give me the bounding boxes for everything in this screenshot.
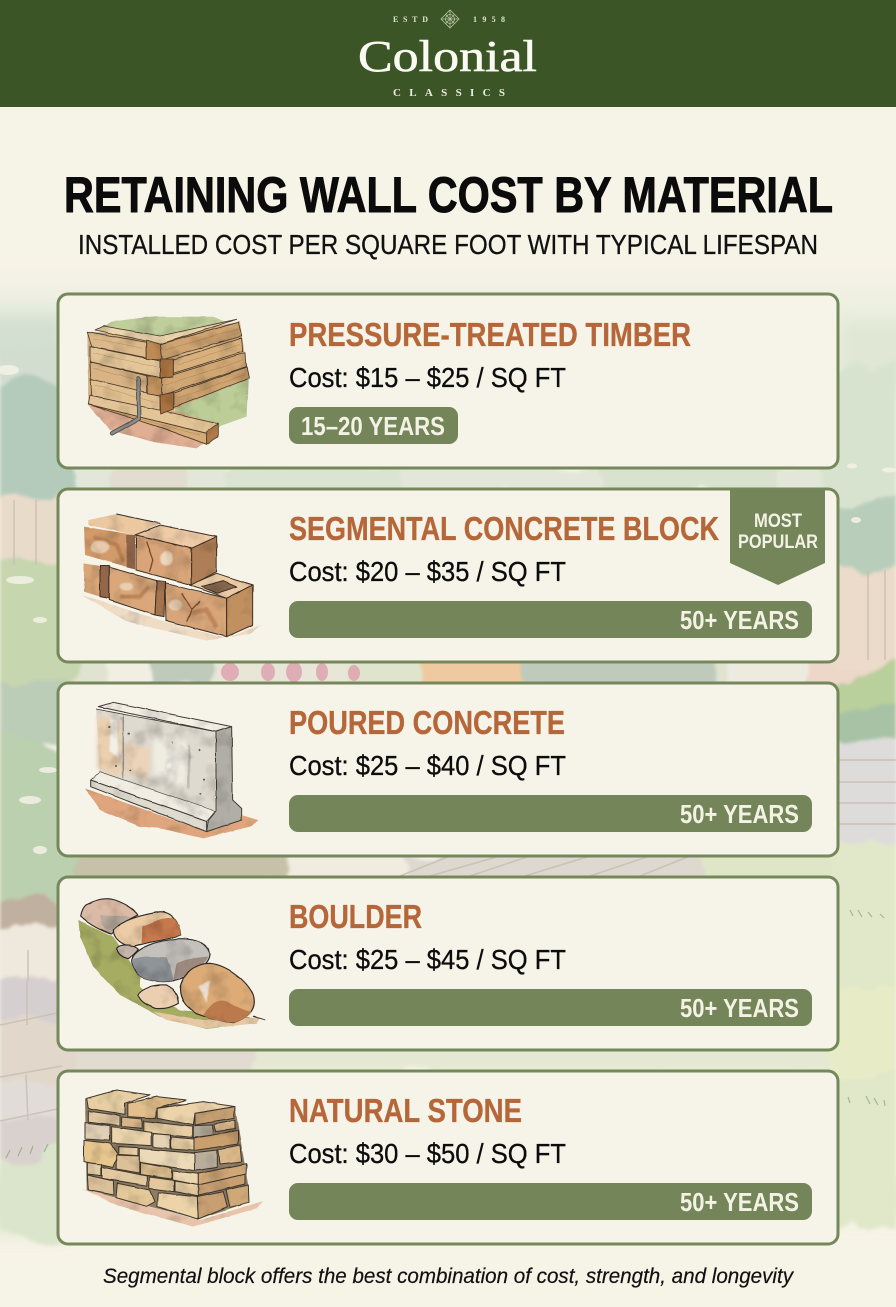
logo: emblem xyxy=(441,10,459,28)
lifespan bar xyxy=(289,1183,812,1220)
icon: concrete blocks xyxy=(82,514,262,641)
lifespan bar xyxy=(289,989,812,1026)
panel: pressure-treated timber xyxy=(58,294,838,468)
cost: Cost: $25 – $45 / SQ FT xyxy=(289,944,566,975)
gap between card 3 and 4 xyxy=(30,846,870,886)
panel: natural stone xyxy=(58,1071,838,1244)
cost: Cost: $25 – $40 / SQ FT xyxy=(289,750,566,781)
badge: most popular: MOST xyxy=(754,511,802,532)
logo: Colonial Classics xyxy=(358,10,537,99)
cost: Cost: $30 – $50 / SQ FT xyxy=(289,1138,566,1169)
icon: stacked stone xyxy=(82,1090,263,1227)
lifespan bar: 15–20 YEARS xyxy=(301,411,445,441)
gap between card 2 and 3 xyxy=(30,652,870,692)
icon: timber wall xyxy=(87,317,249,448)
logo: 1958: 1958 xyxy=(473,15,505,24)
panel: poured concrete xyxy=(58,683,838,856)
logo: CLASSICS: CLASSICS xyxy=(393,87,505,99)
lifespan bar xyxy=(289,601,812,638)
logo: Colonial wordmark: Colonial xyxy=(358,32,537,81)
header band xyxy=(0,0,896,107)
lifespan bar: 50+ YEARS xyxy=(680,1187,799,1217)
badge: most popular xyxy=(730,489,825,585)
heading: POURED CONCRETE xyxy=(289,704,565,741)
lifespan bar: 50+ YEARS xyxy=(680,605,799,635)
cost: Cost: $15 – $25 / SQ FT xyxy=(289,362,566,393)
cost: Cost: $20 – $35 / SQ FT xyxy=(289,556,566,587)
heading: SEGMENTAL CONCRETE BLOCK xyxy=(289,510,719,547)
lifespan bar: 50+ YEARS xyxy=(680,993,799,1023)
logo: ESTD: ESTD xyxy=(393,15,428,24)
footer note: Segmental block offers the best combination of cost, strength, and longevity xyxy=(103,1265,794,1288)
right side scenery xyxy=(825,370,896,510)
heading: PRESSURE-TREATED TIMBER xyxy=(289,316,691,353)
icon: boulders xyxy=(78,899,265,1029)
icon: concrete wall xyxy=(85,702,258,838)
heading: BOULDER xyxy=(289,898,422,935)
panel: segmental concrete block xyxy=(58,489,838,662)
badge: most popular: POPULAR xyxy=(738,532,818,553)
gap between card 4 and 5 xyxy=(30,1040,870,1080)
heading: NATURAL STONE xyxy=(289,1092,522,1129)
left side scenery xyxy=(0,345,75,400)
gap between card 1 and 2 xyxy=(30,460,870,496)
lifespan bar xyxy=(289,795,812,832)
lifespan bar: 50+ YEARS xyxy=(680,799,799,829)
panel: boulder xyxy=(58,877,838,1050)
